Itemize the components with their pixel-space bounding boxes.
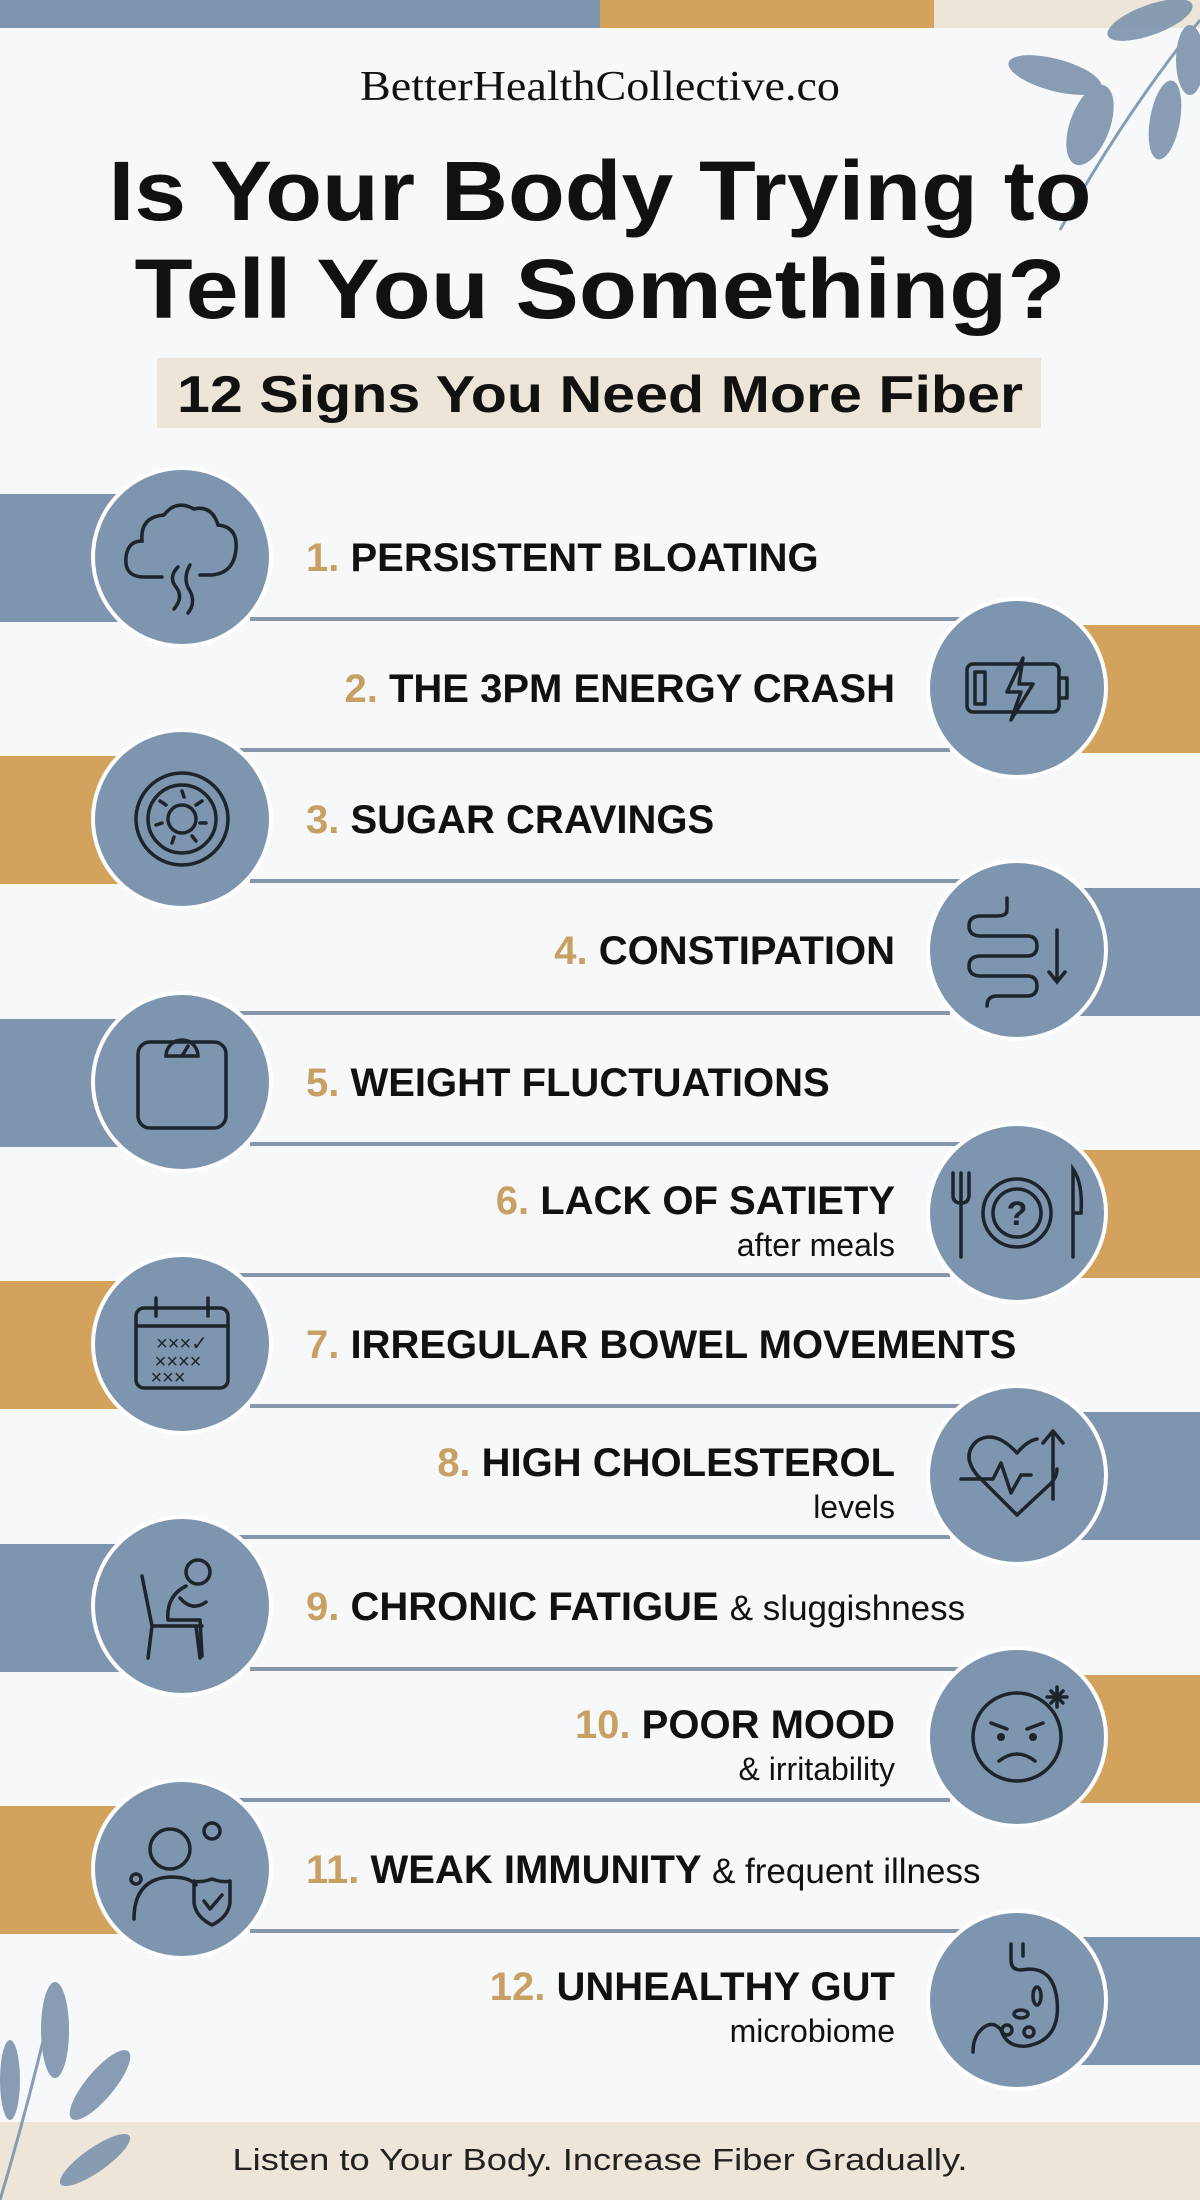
row 10: poor mood — [575, 1648, 1106, 1826]
title: Tell You Something? — [134, 242, 1066, 336]
row 11: weak immunity: 11. WEAK IMMUNITY & frequent illness — [306, 1848, 980, 1892]
row 3: sugar cravings: 3. SUGAR CRAVINGS — [306, 798, 714, 842]
row 5: weight fluctuations: 5. WEIGHT FLUCTUATIONS — [306, 1061, 830, 1105]
subtitle banner: 12 Signs You Need More Fiber — [177, 366, 1023, 424]
icon: donut — [93, 730, 271, 908]
side bands — [0, 494, 1200, 2065]
row 6: lack of satiety: after meals — [737, 1227, 895, 1263]
row 9: chronic fatigue: 9. CHRONIC FATIGUE & sluggishness — [306, 1585, 965, 1629]
icon: calendar: ×××✓ — [156, 1333, 208, 1355]
decorative leaves bottom left — [0, 1982, 139, 2200]
row 6: lack of satiety — [496, 1124, 1106, 1302]
row 8: high cholesterol — [437, 1386, 1106, 1564]
icon: bloating cloud — [93, 468, 271, 646]
row 10: poor mood: 10. POOR MOOD — [575, 1703, 895, 1747]
icon: intestine — [928, 861, 1106, 1039]
top color bar — [0, 0, 1200, 28]
row 9: chronic fatigue — [93, 1517, 965, 1695]
row 3: sugar cravings — [93, 730, 714, 908]
row 7: irregular bowel movements: 7. IRREGULAR BOWEL MOVEMENTS — [306, 1323, 1016, 1367]
site name: BetterHealthCollective.co — [360, 64, 840, 110]
row 12: unhealthy gut: microbiome — [730, 2013, 895, 2049]
icon: person with shield — [93, 1780, 271, 1958]
decorative leaves top right — [1004, 0, 1200, 230]
footer banner: Listen to Your Body. Increase Fiber Gradually. — [232, 2142, 968, 2177]
icon: scale — [93, 993, 271, 1171]
row 1: persistent bloating — [93, 468, 819, 646]
icon: plate with question — [928, 1124, 1106, 1302]
icon: tired person on chair — [93, 1517, 271, 1695]
row 11: weak immunity — [93, 1780, 980, 1958]
title — [108, 144, 1092, 336]
row 4: constipation: 4. CONSTIPATION — [554, 929, 895, 973]
icon: angry face — [928, 1648, 1106, 1826]
row 1: persistent bloating: 1. PERSISTENT BLOATING — [306, 536, 819, 580]
row 12: unhealthy gut: 12. UNHEALTHY GUT — [490, 1965, 895, 2009]
icon: stomach — [928, 1911, 1106, 2089]
row 6: lack of satiety: 6. LACK OF SATIETY — [496, 1179, 895, 1223]
icon: calendar: ×××× — [155, 1351, 201, 1373]
row 7: irregular bowel movements — [93, 1255, 1016, 1433]
row 4: constipation — [554, 861, 1106, 1039]
footer banner — [0, 2122, 1200, 2200]
row 12: unhealthy gut — [490, 1911, 1106, 2089]
icon: heart with pulse — [928, 1386, 1106, 1564]
icon: calendar: ××× — [150, 1367, 186, 1389]
row 10: poor mood: & irritability — [739, 1751, 895, 1787]
row 2: energy crash — [344, 599, 1106, 777]
icon: plate with question: ? — [1007, 1195, 1027, 1233]
row 8: high cholesterol: levels — [813, 1489, 895, 1525]
subtitle banner — [157, 358, 1041, 428]
title: Is Your Body Trying to — [108, 144, 1092, 238]
row 8: high cholesterol: 8. HIGH CHOLESTEROL — [437, 1441, 895, 1485]
row 5: weight fluctuations — [93, 993, 830, 1171]
icon: calendar — [93, 1255, 271, 1433]
row 2: energy crash: 2. THE 3PM ENERGY CRASH — [344, 667, 895, 711]
icon: battery — [928, 599, 1106, 777]
